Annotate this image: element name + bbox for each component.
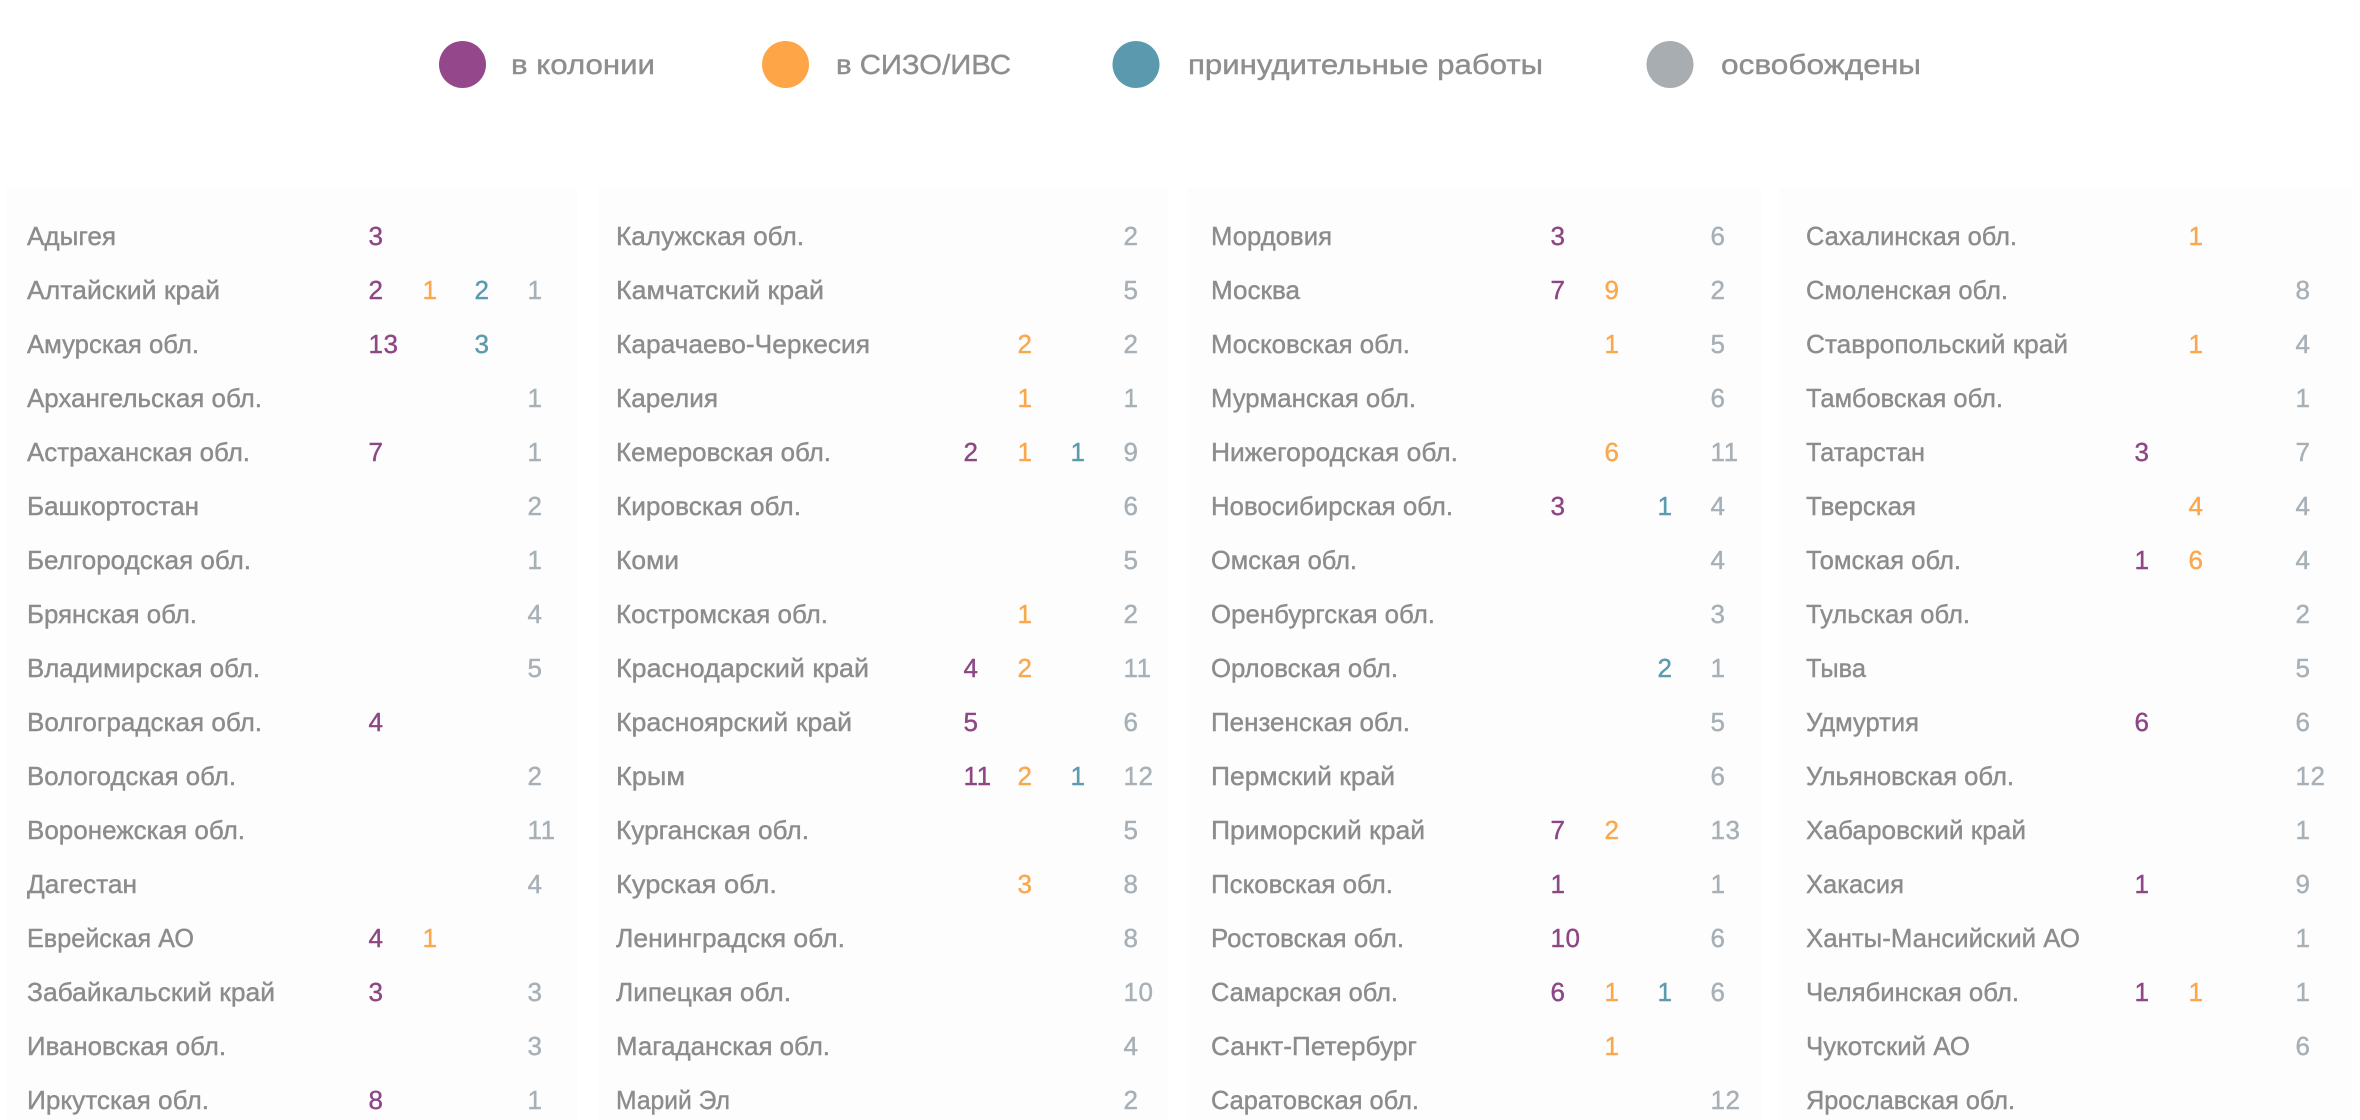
row: Ханты-Мансийский АО: 1	[2296, 923, 2311, 953]
row: Хабаровский край: Хабаровский край	[1806, 815, 2026, 845]
row: Вологодская обл.: Вологодская обл.	[27, 761, 236, 791]
row: Московская обл.	[1211, 329, 1726, 359]
row: Липецкая обл.	[616, 977, 1154, 1007]
row: Тверская: 4	[2296, 491, 2311, 521]
row: Курская обл.	[616, 869, 1139, 899]
row: Амурская обл.: 13	[368, 329, 399, 359]
row: Приморский край: 7	[1550, 815, 1566, 845]
row: Псковская обл.: 1	[1710, 869, 1726, 899]
row: Удмуртия	[1806, 707, 2311, 737]
row: Иркутская обл.: 8	[368, 1085, 384, 1115]
row: Ульяновская обл.: Ульяновская обл.	[1806, 761, 2014, 791]
row: Омская обл.: Омская обл.	[1211, 545, 1357, 575]
row: Ленинградскя обл.	[616, 923, 1139, 953]
row: Тыва: 5	[2296, 653, 2311, 683]
row: Томская обл.	[1806, 545, 2311, 575]
row: Белгородская обл.: 1	[528, 545, 543, 575]
row: Оренбургская обл.	[1211, 599, 1726, 629]
row: Пермский край: 6	[1710, 761, 1726, 791]
row: Магаданская обл.: 4	[1124, 1031, 1139, 1061]
row: Карелия	[616, 383, 1139, 413]
row: Пензенская обл.: Пензенская обл.	[1211, 707, 1410, 737]
row: Мордовия: Мордовия	[1211, 221, 1332, 251]
legend	[439, 41, 1921, 88]
row: Томская обл.: 1	[2134, 545, 2150, 575]
row: Тамбовская обл.: Тамбовская обл.	[1806, 383, 2003, 413]
row: Самарская обл.	[1211, 977, 1726, 1007]
row: Адыгея: 3	[368, 221, 384, 251]
row: Владимирская обл.: 5	[528, 653, 543, 683]
row: Костромская обл.: 1	[1018, 599, 1033, 629]
row: Новосибирская обл.: Новосибирская обл.	[1211, 491, 1453, 521]
legend item: освобождены: освобождены	[1721, 49, 1921, 80]
row: Тыва: Тыва	[1806, 653, 1867, 683]
row: Крым: 1	[1070, 761, 1086, 791]
row: Красноярский край: 5	[964, 707, 979, 737]
row: Владимирская обл.: Владимирская обл.	[27, 653, 260, 683]
row: Камчатский край	[616, 275, 1139, 305]
row: Карачаево-Черкесия	[616, 329, 1139, 359]
row: Костромская обл.: Костромская обл.	[616, 599, 828, 629]
row: Крым: 2	[1018, 761, 1033, 791]
row: Алтайский край	[27, 275, 543, 305]
row: Ивановская обл.: 3	[528, 1031, 543, 1061]
row: Карелия: 1	[1124, 383, 1139, 413]
row: Новосибирская обл.: 1	[1658, 491, 1673, 521]
row: Марий Эл	[616, 1085, 1139, 1115]
legend item: освобождены	[1646, 41, 1921, 88]
row: Ульяновская обл.: 12	[2296, 761, 2326, 791]
row: Карелия: Карелия	[616, 383, 718, 413]
row: Сахалинская обл.	[1806, 221, 2204, 251]
row: Ульяновская обл.	[1806, 761, 2326, 791]
row: Омская обл.	[1211, 545, 1726, 575]
row: Карачаево-Черкесия: 2	[1124, 329, 1139, 359]
row: Нижегородская обл.: 11	[1710, 437, 1739, 467]
row: Тверская	[1806, 491, 2311, 521]
row: Пермский край	[1211, 761, 1726, 791]
panel: column 2 Калужская–Марий Эл	[598, 187, 1168, 1120]
row: Чукотский АО: Чукотский АО	[1806, 1031, 1970, 1061]
row: Приморский край: 2	[1604, 815, 1620, 845]
row: Самарская обл.: Самарская обл.	[1211, 977, 1398, 1007]
row: Дагестан: 4	[528, 869, 543, 899]
row: Татарстан: 7	[2296, 437, 2311, 467]
row: Новосибирская обл.	[1211, 491, 1726, 521]
row: Сахалинская обл.: Сахалинская обл.	[1806, 221, 2017, 251]
row: Приморский край	[1211, 815, 1741, 845]
row: Магаданская обл.	[616, 1031, 1139, 1061]
row: Хакасия: Хакасия	[1806, 869, 1904, 899]
row: Крым: 11	[964, 761, 992, 791]
row: Московская обл.: 5	[1710, 329, 1726, 359]
row: Нижегородская обл.	[1211, 437, 1739, 467]
row: Приморский край: 13	[1710, 815, 1741, 845]
row: Курская обл.: 3	[1018, 869, 1033, 899]
row: Приморский край: Приморский край	[1211, 815, 1425, 845]
row: Челябинская обл.: 1	[2296, 977, 2311, 1007]
row: Ставропольский край	[1806, 329, 2311, 359]
row: Башкортостан	[27, 491, 543, 521]
row: Владимирская обл.	[27, 653, 543, 683]
row: Мурманская обл.: Мурманская обл.	[1211, 383, 1416, 413]
row: Архангельская обл.	[27, 383, 543, 413]
row: Красноярский край: Красноярский край	[616, 707, 852, 737]
row: Еврейская АО: 4	[368, 923, 384, 953]
row: Ростовская обл.: Ростовская обл.	[1211, 923, 1404, 953]
row: Белгородская обл.	[27, 545, 543, 575]
row: Москва: 9	[1604, 275, 1620, 305]
row: Белгородская обл.: Белгородская обл.	[27, 545, 251, 575]
row: Челябинская обл.: 1	[2188, 977, 2204, 1007]
row: Марий Эл: 2	[1124, 1085, 1139, 1115]
row: Кемеровская обл.: 1	[1018, 437, 1033, 467]
row: Мурманская обл.: 6	[1710, 383, 1726, 413]
row: Магаданская обл.: Магаданская обл.	[616, 1031, 830, 1061]
row: Удмуртия: Удмуртия	[1806, 707, 1919, 737]
row: Волгоградская обл.: Волгоградская обл.	[27, 707, 262, 737]
row: Тверская: Тверская	[1806, 491, 1916, 521]
row: Московская обл.: 1	[1604, 329, 1620, 359]
row: Санкт-Петербург: Санкт-Петербург	[1211, 1031, 1417, 1061]
row: Пермский край: Пермский край	[1211, 761, 1395, 791]
row: Омская обл.: 4	[1710, 545, 1726, 575]
row: Краснодарский край: 4	[964, 653, 979, 683]
row: Ставропольский край: Ставропольский край	[1806, 329, 2068, 359]
row: Ставропольский край: 1	[2188, 329, 2204, 359]
row: Курская обл.: Курская обл.	[616, 869, 777, 899]
row: Самарская обл.: 6	[1550, 977, 1566, 1007]
row: Тамбовская обл.: 1	[2296, 383, 2311, 413]
legend item: в СИЗО/ИВС: в СИЗО/ИВС	[836, 49, 1011, 80]
row: Алтайский край: 2	[368, 275, 384, 305]
row: Нижегородская обл.: 6	[1604, 437, 1620, 467]
row: Курганская обл.: Курганская обл.	[616, 815, 809, 845]
row: Орловская обл.	[1211, 653, 1726, 683]
legend item: в колонии: в колонии	[511, 49, 655, 80]
row: Еврейская АО	[27, 923, 438, 953]
row: Татарстан: 3	[2134, 437, 2150, 467]
row: Оренбургская обл.: Оренбургская обл.	[1211, 599, 1435, 629]
row: Псковская обл.: Псковская обл.	[1211, 869, 1393, 899]
row: Москва: 2	[1710, 275, 1726, 305]
row: Челябинская обл.	[1806, 977, 2311, 1007]
row: Воронежская обл.: 11	[528, 815, 556, 845]
row: Камчатский край: 5	[1124, 275, 1139, 305]
row: Тульская обл.	[1806, 599, 2311, 629]
row: Ивановская обл.	[27, 1031, 543, 1061]
row: Тыва	[1806, 653, 2311, 683]
row: Орловская обл.: 2	[1658, 653, 1673, 683]
row: Оренбургская обл.: 3	[1710, 599, 1726, 629]
row: Москва: Москва	[1211, 275, 1301, 305]
row: Ставропольский край: 4	[2296, 329, 2311, 359]
row: Томская обл.: 6	[2188, 545, 2204, 575]
row: Саратовская обл.: Саратовская обл.	[1211, 1085, 1419, 1115]
row: Камчатский край: Камчатский край	[616, 275, 824, 305]
row: Карелия: 1	[1018, 383, 1033, 413]
row: Кировская обл.: 6	[1124, 491, 1139, 521]
row: Ярославская обл.: Ярославская обл.	[1806, 1085, 2015, 1115]
row: Татарстан	[1806, 437, 2311, 467]
row: Краснодарский край: 11	[1124, 653, 1152, 683]
row: Еврейская АО: 1	[422, 923, 438, 953]
row: Дагестан	[27, 869, 543, 899]
row: Адыгея	[27, 221, 384, 251]
row: Курганская обл.: 5	[1124, 815, 1139, 845]
row: Новосибирская обл.: 3	[1550, 491, 1566, 521]
row: Забайкальский край	[27, 977, 543, 1007]
row: Амурская обл.	[27, 329, 490, 359]
row: Псковская обл.: 1	[1550, 869, 1566, 899]
row: Коми: 5	[1124, 545, 1139, 575]
row: Ленинградскя обл.: Ленинградскя обл.	[616, 923, 845, 953]
row: Иркутская обл.	[27, 1085, 543, 1115]
row: Мурманская обл.	[1211, 383, 1726, 413]
row: Крым: 12	[1124, 761, 1154, 791]
row: Ханты-Мансийский АО	[1806, 923, 2311, 953]
row: Марий Эл: Марий Эл	[616, 1085, 730, 1115]
row: Смоленская обл.: 8	[2296, 275, 2311, 305]
row: Алтайский край: Алтайский край	[27, 275, 220, 305]
row: Новосибирская обл.: 4	[1710, 491, 1726, 521]
row: Курганская обл.	[616, 815, 1139, 845]
row: Удмуртия: 6	[2134, 707, 2150, 737]
row: Астраханская обл.: 7	[368, 437, 384, 467]
row: Самарская обл.: 1	[1658, 977, 1673, 1007]
row: Челябинская обл.: 1	[2134, 977, 2150, 1007]
row: Кемеровская обл.: 2	[964, 437, 979, 467]
row: Нижегородская обл.: Нижегородская обл.	[1211, 437, 1458, 467]
panel: column 4 Сахалинская–Ярославская	[1780, 187, 2352, 1120]
row: Липецкая обл.: 10	[1124, 977, 1154, 1007]
row: Ханты-Мансийский АО: Ханты-Мансийский АО	[1806, 923, 2080, 953]
row: Башкортостан: 2	[528, 491, 543, 521]
row: Вологодская обл.	[27, 761, 543, 791]
row: Самарская обл.: 1	[1604, 977, 1620, 1007]
row: Орловская обл.: Орловская обл.	[1211, 653, 1398, 683]
row: Коми	[616, 545, 1139, 575]
row: Смоленская обл.: Смоленская обл.	[1806, 275, 2008, 305]
row: Липецкая обл.: Липецкая обл.	[616, 977, 791, 1007]
row: Ростовская обл.	[1211, 923, 1726, 953]
row: Тамбовская обл.	[1806, 383, 2311, 413]
row: Кировская обл.: Кировская обл.	[616, 491, 801, 521]
row: Хабаровский край: 1	[2296, 815, 2311, 845]
row: Мордовия	[1211, 221, 1726, 251]
row: Калужская обл.: Калужская обл.	[616, 221, 804, 251]
panel: column 1 Адыгея–Иркутская	[6, 187, 577, 1120]
row: Кемеровская обл.: 1	[1070, 437, 1086, 467]
row: Крым	[616, 761, 1154, 791]
row: Кемеровская обл.	[616, 437, 1139, 467]
row: Карачаево-Черкесия: Карачаево-Черкесия	[616, 329, 870, 359]
row: Кировская обл.	[616, 491, 1139, 521]
row: Амурская обл.: 3	[474, 329, 490, 359]
row: Астраханская обл.: Астраханская обл.	[27, 437, 250, 467]
row: Краснодарский край: 2	[1018, 653, 1033, 683]
row: Красноярский край	[616, 707, 1139, 737]
row: Амурская обл.: Амурская обл.	[27, 329, 199, 359]
row: Кемеровская обл.: Кемеровская обл.	[616, 437, 831, 467]
row: Алтайский край: 1	[528, 275, 543, 305]
legend item: в СИЗО/ИВС	[762, 41, 1011, 88]
row: Адыгея: Адыгея	[27, 221, 116, 251]
row: Санкт-Петербург: 1	[1604, 1031, 1620, 1061]
row: Москва: 7	[1550, 275, 1566, 305]
row: Ивановская обл.: Ивановская обл.	[27, 1031, 226, 1061]
row: Воронежская обл.	[27, 815, 556, 845]
row: Краснодарский край	[616, 653, 1152, 683]
row: Саратовская обл.	[1211, 1085, 1741, 1115]
row: Тульская обл.: Тульская обл.	[1806, 599, 1970, 629]
row: Брянская обл.	[27, 599, 543, 629]
row: Удмуртия: 6	[2296, 707, 2311, 737]
row: Астраханская обл.	[27, 437, 543, 467]
panel: column 3 Мордовия–Саратовская	[1188, 187, 1761, 1120]
row: Чукотский АО: 6	[2296, 1031, 2311, 1061]
row: Ростовская обл.: 6	[1710, 923, 1726, 953]
row: Вологодская обл.: 2	[528, 761, 543, 791]
row: Кемеровская обл.: 9	[1124, 437, 1139, 467]
row: Краснодарский край: Краснодарский край	[616, 653, 869, 683]
row: Забайкальский край: 3	[368, 977, 384, 1007]
row: Пензенская обл.	[1211, 707, 1726, 737]
row: Ростовская обл.: 10	[1550, 923, 1581, 953]
row: Брянская обл.: 4	[528, 599, 543, 629]
row: Архангельская обл.: 1	[528, 383, 543, 413]
row: Московская обл.: Московская обл.	[1211, 329, 1410, 359]
row: Красноярский край: 6	[1124, 707, 1139, 737]
row: Псковская обл.	[1211, 869, 1726, 899]
row: Москва	[1211, 275, 1726, 305]
row: Челябинская обл.: Челябинская обл.	[1806, 977, 2019, 1007]
row: Костромская обл.: 2	[1124, 599, 1139, 629]
row: Карачаево-Черкесия: 2	[1018, 329, 1033, 359]
row: Дагестан: Дагестан	[27, 869, 137, 899]
row: Татарстан: Татарстан	[1806, 437, 1925, 467]
row: Алтайский край: 2	[474, 275, 490, 305]
row: Волгоградская обл.	[27, 707, 384, 737]
row: Хакасия	[1806, 869, 2311, 899]
row: Ленинградскя обл.: 8	[1124, 923, 1139, 953]
row: Смоленская обл.	[1806, 275, 2311, 305]
legend item: принудительные работы: принудительные работы	[1188, 49, 1543, 80]
row: Пензенская обл.: 5	[1710, 707, 1726, 737]
row: Тульская обл.: 2	[2296, 599, 2311, 629]
row: Коми: Коми	[616, 545, 679, 575]
row: Астраханская обл.: 1	[528, 437, 543, 467]
row: Калужская обл.: 2	[1124, 221, 1139, 251]
row: Волгоградская обл.: 4	[368, 707, 384, 737]
row: Орловская обл.: 1	[1710, 653, 1726, 683]
row: Костромская обл.	[616, 599, 1139, 629]
row: Алтайский край: 1	[422, 275, 438, 305]
row: Мордовия: 3	[1550, 221, 1566, 251]
row: Иркутская обл.: 1	[528, 1085, 543, 1115]
legend item: в колонии	[439, 41, 655, 88]
row: Иркутская обл.: Иркутская обл.	[27, 1085, 209, 1115]
row: Санкт-Петербург	[1211, 1031, 1620, 1061]
row: Хакасия: 1	[2134, 869, 2150, 899]
row: Томская обл.: 4	[2296, 545, 2311, 575]
row: Воронежская обл.: Воронежская обл.	[27, 815, 245, 845]
row: Забайкальский край: Забайкальский край	[27, 977, 275, 1007]
row: Самарская обл.: 6	[1710, 977, 1726, 1007]
row: Башкортостан: Башкортостан	[27, 491, 199, 521]
row: Саратовская обл.: 12	[1710, 1085, 1741, 1115]
row: Хабаровский край	[1806, 815, 2311, 845]
row: Калужская обл.	[616, 221, 1139, 251]
row: Еврейская АО: Еврейская АО	[27, 923, 194, 953]
row: Сахалинская обл.: 1	[2188, 221, 2204, 251]
row: Томская обл.: Томская обл.	[1806, 545, 1961, 575]
row: Крым: Крым	[616, 761, 685, 791]
row: Чукотский АО	[1806, 1031, 2311, 1061]
row: Тверская: 4	[2188, 491, 2204, 521]
row: Забайкальский край: 3	[528, 977, 543, 1007]
legend item: принудительные работы	[1112, 41, 1543, 88]
row: Хакасия: 9	[2296, 869, 2311, 899]
row: Мордовия: 6	[1710, 221, 1726, 251]
row: Брянская обл.: Брянская обл.	[27, 599, 197, 629]
row: Курская обл.: 8	[1124, 869, 1139, 899]
row: Архангельская обл.: Архангельская обл.	[27, 383, 262, 413]
